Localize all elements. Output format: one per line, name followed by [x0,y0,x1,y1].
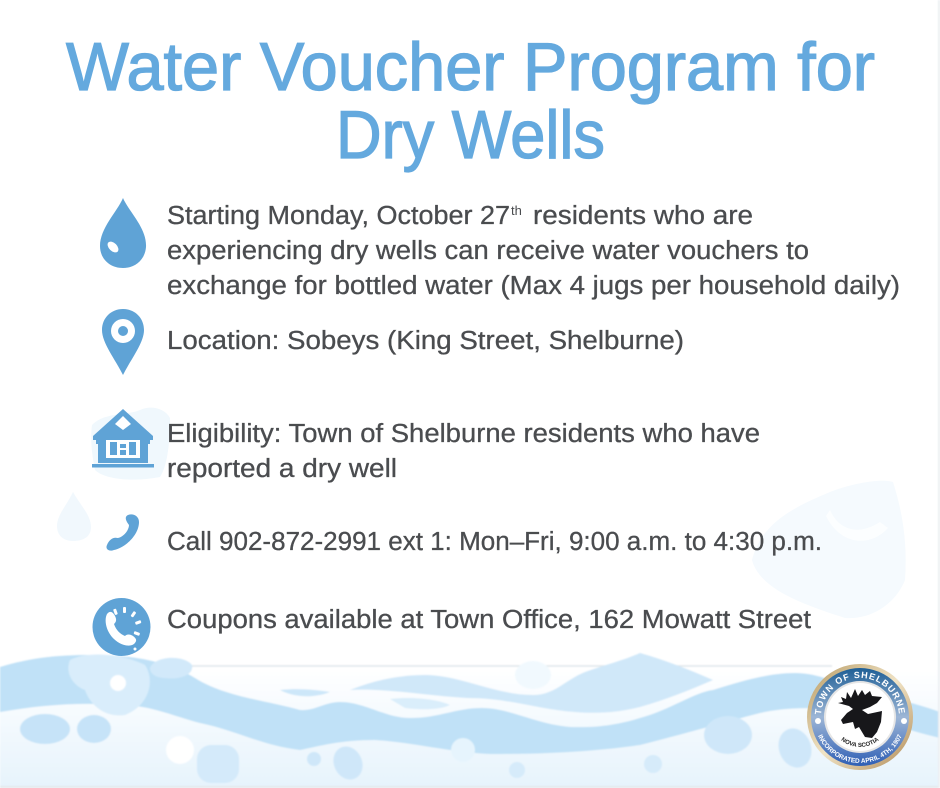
logo text: town name: TOWN OF SHELBURNE [814,672,905,714]
text: call: Call 902-872-2991 ext 1: Mon–Fri, 9:00 a.m. to 4:30 p.m. [167,528,822,556]
text: eligibility [167,420,760,483]
icon: location pin [102,309,144,375]
logo text: province: NOVA SCOTIA [841,737,879,747]
text: program start: th [511,203,522,218]
icon: phone in circle [92,598,150,656]
logo: Town of Shelburne seal [807,664,913,770]
icon: house [92,409,154,468]
logo: moose silhouette [838,689,882,738]
background: faint water shapes [57,408,906,618]
text: program start: exchange for bottled water (Max 4 jugs per household daily) [167,272,900,300]
text: program start [167,202,900,300]
text: location: Location: Sobeys (King Street, Shelburne) [167,327,684,355]
text: eligibility: reported a dry well [167,455,397,483]
logo: stars [815,718,907,724]
title: Water Voucher Program for [66,29,875,105]
text: eligibility: Eligibility: Town of Shelburne residents who have [167,420,760,448]
text: program start: Starting Monday, October 27 [167,202,510,230]
text: program start: experiencing dry wells can receive water vouchers to [167,237,809,265]
icon: phone handset [106,514,139,551]
title [66,29,875,173]
icon: water drop [100,198,146,268]
text: coupons: Coupons available at Town Office, 162 Mowatt Street [167,606,811,634]
title: Dry Wells [336,97,605,173]
text: program start: residents who are [533,202,753,230]
logo text: incorporated: INCORPORATED APRIL 4TH, 1907 [818,734,902,763]
